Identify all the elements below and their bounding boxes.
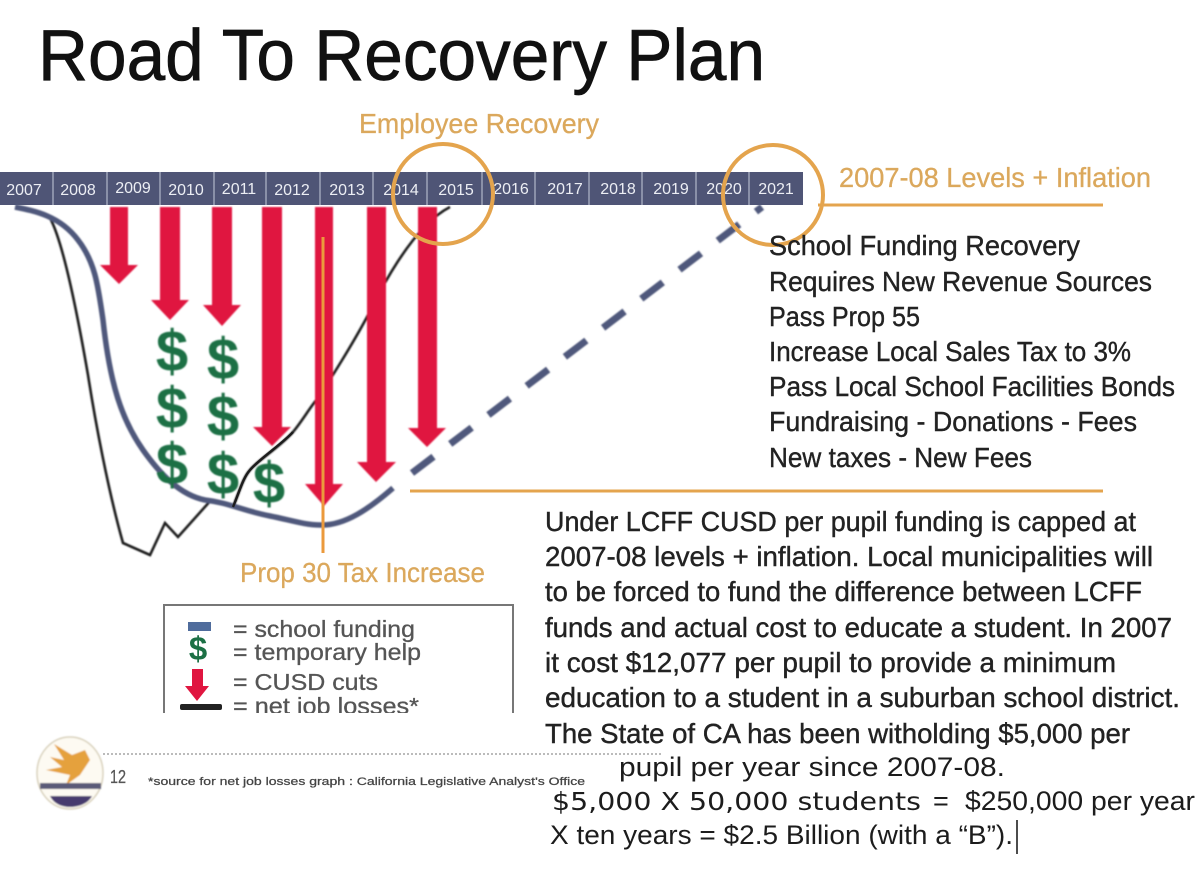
temporary help dollars: $: [253, 451, 285, 516]
projected recovery dashed line: [412, 207, 762, 473]
text block: LCFF paragraph: Under LCFF CUSD per pupil funding is capped at: [545, 506, 1136, 537]
timeline bar: 2009: [115, 180, 151, 197]
CUSD cut arrows: [100, 207, 446, 506]
text block: school funding recovery: Fundraising - Donations - Fees: [769, 406, 1137, 437]
legend swatch: school funding: [188, 622, 211, 631]
timeline bar: [0, 172, 803, 205]
text block: school funding recovery: New taxes - New Fees: [769, 442, 1032, 473]
timeline bar: 2012: [274, 182, 310, 199]
legend: [164, 605, 513, 719]
temporary help dollars: $: [156, 319, 188, 384]
black line over arrow head: [233, 432, 293, 507]
legend clip mask: [140, 713, 540, 743]
text block: calculation: =: [933, 786, 949, 816]
circle: 2014-2015 employee recovery: [393, 144, 493, 244]
legend icon: dollar: $: [189, 630, 207, 667]
legend labels: = CUSD cuts: [233, 669, 378, 695]
text block: school funding recovery: School Funding Recovery: [769, 230, 1080, 261]
timeline bar: 2014: [383, 182, 419, 199]
orange rule: upper: [818, 204, 1103, 206]
legend labels: = school funding: [233, 616, 415, 642]
legend labels: = net job losses*: [233, 693, 419, 719]
chart: job losses, funding, cuts: [15, 207, 762, 555]
prop 30 marker line: [322, 237, 324, 553]
text block: LCFF paragraph: The State of CA has been witholding $5,000 per: [545, 718, 1130, 749]
text block: LCFF paragraph: it cost $12,077 per pupil to provide a minimum: [545, 647, 1116, 678]
temporary help dollars: $: [207, 442, 239, 507]
text block: calculation: pupil per year since 2007-08.: [619, 752, 1005, 782]
source note: *source for net job losses graph : California Legislative Analyst's Office: [148, 776, 585, 788]
timeline bar: 2015: [438, 182, 474, 199]
timeline bar: 2010: [168, 182, 204, 199]
icon: district logo: [37, 737, 103, 809]
timeline bar: 2019: [653, 181, 689, 198]
dotted footer rule: [103, 753, 662, 755]
text block: LCFF paragraph: 2007-08 levels + inflation. Local municipalities will: [545, 541, 1153, 572]
orange rule: lower: [410, 490, 1103, 492]
timeline bar: 2007: [6, 182, 42, 199]
temporary help dollars: [156, 319, 285, 516]
text block: calculation: $250,000 per year: [965, 786, 1195, 816]
text block: LCFF paragraph: [545, 506, 1180, 749]
temporary help dollars: $: [156, 432, 188, 497]
timeline bar: 2021: [758, 181, 794, 198]
legend icon: red arrow: [185, 669, 209, 701]
circle: 2021: [723, 145, 823, 245]
timeline bar: 2013: [329, 182, 365, 199]
text block: school funding recovery: Requires New Revenue Sources: [769, 266, 1152, 297]
text block: school funding recovery: [769, 230, 1175, 473]
label: employee recovery: Employee Recovery: [359, 108, 599, 139]
temporary help dollars: $: [156, 376, 188, 441]
text block: calculation: $5,000 X 50,000 students: [552, 787, 921, 816]
timeline bar: 2020: [706, 181, 742, 198]
label: prop 30: Prop 30 Tax Increase: [240, 557, 485, 588]
text block: LCFF paragraph: funds and actual cost to educate a student. In 2007: [545, 612, 1172, 643]
timeline bar: 2008: [60, 182, 96, 199]
legend labels: = temporary help: [233, 639, 421, 665]
title: Road To Recovery Plan: [38, 16, 765, 96]
text block: LCFF paragraph: to be forced to fund the difference between LCFF: [545, 576, 1142, 607]
text block: calculation: [550, 752, 1195, 854]
legend swatch: job losses: [180, 704, 222, 710]
text block: LCFF paragraph: education to a student in a suburban school district.: [545, 682, 1180, 713]
timeline bar: 2018: [600, 181, 636, 198]
text block: school funding recovery: Pass Local School Facilities Bonds: [769, 371, 1175, 402]
label: levels plus inflation: 2007-08 Levels + Inflation: [839, 162, 1151, 193]
page number: 12: [110, 767, 126, 787]
temporary help dollars: $: [207, 327, 239, 392]
timeline bar: 2016: [493, 181, 529, 198]
text block: school funding recovery: Pass Prop 55: [769, 301, 920, 332]
timeline bar: 2011: [222, 181, 256, 198]
school funding curve: [15, 207, 393, 525]
net job losses line: [50, 207, 450, 555]
text block: calculation: X ten years = $2.5 Billion (with a “B”).: [550, 820, 1013, 850]
legend labels: [233, 616, 421, 719]
temporary help dollars: $: [207, 384, 239, 449]
text block: school funding recovery: Increase Local Sales Tax to 3%: [769, 336, 1131, 367]
timeline bar: 2017: [547, 181, 583, 198]
